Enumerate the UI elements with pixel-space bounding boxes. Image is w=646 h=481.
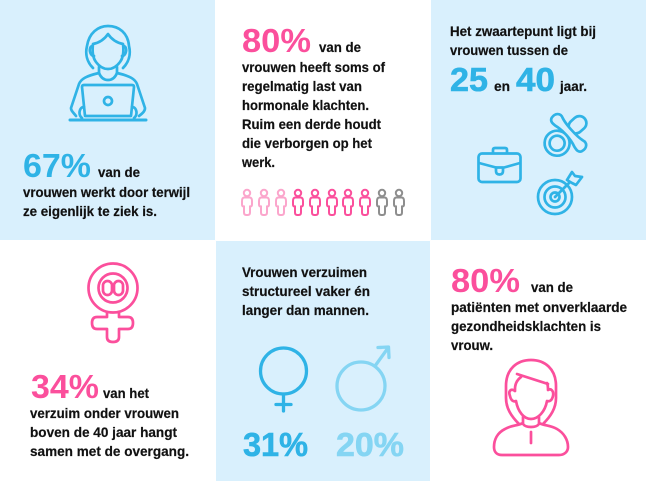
- text: hormonale klachten: die verborgen op het: [242, 135, 372, 151]
- icon: pacifier: [533, 101, 600, 169]
- text: hormonale klachten: [241, 39, 385, 170]
- text: zwaartepunt intro: [450, 23, 596, 58]
- stat: 80%: 80%: [451, 262, 520, 299]
- icon: male symbol: [337, 347, 389, 410]
- text: verzuim onder vrouwen: samen met de overgang.: [30, 443, 189, 459]
- stat: 25 en 40 jaar: 25: [450, 61, 488, 98]
- text: vrouwen verzuimen vaker: langer dan mannen.: [242, 302, 369, 318]
- text: hormonale klachten: hormonale klachten.: [242, 97, 369, 113]
- text: onverklaarde klachten: patiënten met onverklaarde: [451, 299, 627, 315]
- icon: target with arrow: [538, 172, 582, 214]
- stat: 25 en 40 jaar: [450, 61, 587, 98]
- stat: 25 en 40 jaar: en: [494, 78, 510, 94]
- stat: 80%: 80%: [242, 22, 311, 59]
- text: van de vrouwen werkt door: van de: [98, 164, 140, 180]
- text: zwaartepunt intro: Het zwaartepunt ligt bij: [450, 23, 596, 39]
- text: verzuim onder vrouwen: [30, 385, 189, 459]
- panel: hormonale klachten: [215, 0, 431, 240]
- text: onverklaarde klachten: vrouw.: [451, 337, 493, 353]
- icon: woman behind laptop: [70, 26, 146, 120]
- text: onverklaarde klachten: [451, 279, 627, 353]
- icon: female symbol: [260, 348, 306, 411]
- text: vrouwen verzuimen vaker: Vrouwen verzuimen: [242, 264, 367, 280]
- text: van de vrouwen werkt door: vrouwen werkt door terwijl: [23, 184, 190, 200]
- pictogram: row of ten people: [242, 190, 404, 215]
- text: vrouwen verzuimen vaker: [242, 264, 370, 318]
- stat: 25 en 40 jaar: jaar.: [559, 78, 587, 94]
- stat: 34%: 34%: [31, 368, 99, 405]
- text: hormonale klachten: regelmatig last van: [242, 78, 362, 94]
- icon: briefcase: [478, 148, 520, 182]
- text: onverklaarde klachten: gezondheidsklachten is: [451, 318, 601, 334]
- text: hormonale klachten: vrouwen heeft soms of: [242, 59, 385, 75]
- stat: 31%: 31%: [243, 426, 308, 463]
- stat: 67%: 67%: [23, 147, 91, 184]
- text: van de vrouwen werkt door: ze eigenlijk te ziek is.: [23, 203, 157, 219]
- text: verzuim onder vrouwen: verzuim onder vrouwen: [30, 405, 179, 421]
- text: verzuim onder vrouwen: van het: [103, 385, 149, 401]
- icon: venus symbol with hormone: [88, 264, 138, 342]
- panel: werkt door terwijl ziek: [0, 0, 215, 240]
- stat: 20%: 20%: [336, 426, 404, 463]
- text: hormonale klachten: werk.: [241, 154, 275, 170]
- panel: vrouwen en mannen: [216, 241, 430, 481]
- icon: woman portrait: [494, 360, 568, 455]
- panel: onverklaarde klachten: [431, 241, 646, 481]
- text: verzuim onder vrouwen: boven de 40 jaar hangt: [30, 424, 177, 440]
- panel: zwaartepunt: [431, 0, 646, 240]
- text: onverklaarde klachten: van de: [531, 279, 573, 295]
- text: van de vrouwen werkt door: [23, 164, 190, 219]
- text: zwaartepunt intro: vrouwen tussen de: [450, 42, 568, 58]
- text: vrouwen verzuimen vaker: structureel vaker én: [242, 283, 370, 299]
- panel: verzuim en overgang: [0, 240, 215, 481]
- text: hormonale klachten: Ruim een derde houdt: [242, 116, 381, 132]
- text: hormonale klachten: van de: [319, 39, 361, 55]
- stat: 25 en 40 jaar: 40: [516, 61, 555, 98]
